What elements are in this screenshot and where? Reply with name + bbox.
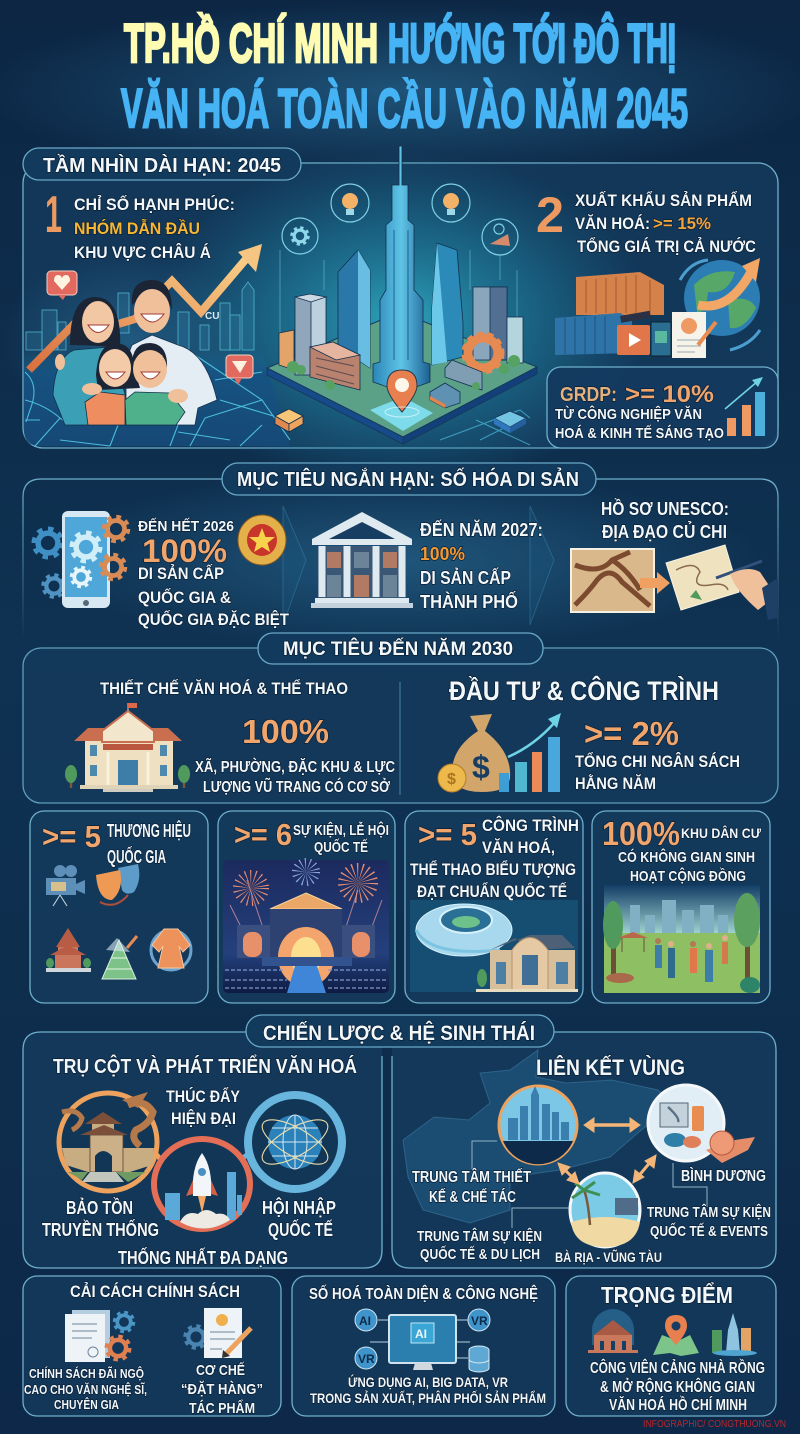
icon: money bag and bars: $ bbox=[472, 749, 490, 785]
item 2 cultural export: >= 15% bbox=[653, 214, 711, 233]
left tower, orange block bbox=[279, 330, 294, 370]
text block: policy items: CAO CHO VĂN NGHỆ SĨ, bbox=[24, 1382, 147, 1397]
text block: Nha Rong bbox=[590, 1358, 765, 1414]
chevron dividers bbox=[283, 506, 554, 625]
icon: ribbon bubble bbox=[226, 355, 253, 385]
stat: 2 percent: >= 2% bbox=[584, 715, 679, 752]
ring: tradition bbox=[59, 1092, 163, 1191]
stat: 100%: 100% bbox=[242, 713, 329, 750]
text block: policy items bbox=[24, 1362, 263, 1417]
text block: total budget: HẰNG NĂM bbox=[575, 774, 656, 793]
heading: cultural institutions: THIẾT CHẾ VĂN HOÁ & THỂ THAO bbox=[100, 679, 348, 698]
street grid floor bbox=[24, 350, 290, 446]
icon: VR bubble: VR bbox=[471, 1314, 488, 1328]
icon: cube orange bbox=[275, 409, 303, 432]
text block: total budget: TỔNG CHI NGÂN SÁCH bbox=[575, 752, 740, 771]
heading pill: long-term vision: TẦM NHÌN DÀI HẠN: 2045 bbox=[43, 154, 281, 177]
item 1 happiness index: CHỈ SỐ HẠNH PHÚC: bbox=[74, 194, 235, 214]
item 2 cultural export: XUẤT KHẨU SẢN PHẨM bbox=[575, 191, 752, 210]
pink building bbox=[310, 342, 360, 390]
labels: pillars: TRUYỀN THỐNG bbox=[42, 1219, 159, 1240]
icon: shipping containers bbox=[555, 272, 664, 355]
card: community spaces: CÓ KHÔNG GIAN SINH bbox=[618, 848, 755, 866]
arrows: links bbox=[558, 1118, 656, 1184]
callout: GRDP: TỪ CÔNG NGHIỆP VĂN bbox=[555, 405, 702, 423]
ring: integration bbox=[237, 1095, 342, 1189]
card: national brands: THƯƠNG HIỆU bbox=[107, 820, 191, 841]
street grid bbox=[25, 355, 530, 446]
panel: pillars: TRỤ CỘT VÀ PHÁT TRIỂN VĂN HOÁ bbox=[53, 1054, 357, 1078]
labels: regional hubs: TRUNG TÂM SỰ KIỆN bbox=[647, 1203, 771, 1221]
icon: money bag and bars: $ bbox=[447, 771, 456, 788]
text block: end of 2026: QUỐC GIA ĐẶC BIỆT bbox=[138, 609, 290, 629]
map silhouette bbox=[403, 1050, 668, 1223]
heading pill: goals to 2030: MỤC TIÊU ĐẾN NĂM 2030 bbox=[283, 638, 513, 660]
icon: AI bubble: AI bbox=[359, 1314, 371, 1328]
labels: regional hubs: TRUNG TÂM SỰ KIỆN bbox=[417, 1227, 542, 1245]
text block: total budget bbox=[575, 752, 740, 793]
text block: policy items: CƠ CHẾ bbox=[196, 1362, 245, 1379]
illustration: park bbox=[603, 885, 760, 993]
panel: key projects: TRỌNG ĐIỂM bbox=[601, 1281, 733, 1308]
text block: Nha Rong: VĂN HOÁ HỒ CHÍ MINH bbox=[609, 1395, 747, 1414]
icon: media and document bbox=[617, 311, 716, 358]
title: TP.HỒ CHÍ MINH bbox=[124, 12, 378, 74]
panel: regional links bbox=[392, 1032, 776, 1268]
text block: by 2027: 100% bbox=[420, 544, 465, 564]
growth arrow: CU bbox=[205, 311, 219, 322]
card: iconic works: THỂ THAO BIỂU TƯỢNG bbox=[410, 860, 576, 879]
panel: digital transformation: SỐ HOÁ TOÀN DIỆN & CÔNG NGHỆ bbox=[309, 1283, 538, 1303]
panel: key projects bbox=[566, 1276, 776, 1416]
card: community spaces bbox=[592, 811, 770, 1003]
illustration: stage with fireworks bbox=[223, 860, 389, 993]
illustration: stadium and opera house bbox=[410, 900, 578, 992]
labels: regional hubs: KẾ & CHẾ TÁC bbox=[429, 1187, 516, 1206]
heading: investment: ĐẦU TƯ & CÔNG TRÌNH bbox=[449, 675, 719, 706]
text block: by 2027: THÀNH PHỐ bbox=[420, 591, 518, 612]
text block: by 2027: DI SẢN CẤP bbox=[420, 567, 511, 588]
card: iconic works: VĂN HOÁ, bbox=[482, 838, 555, 857]
icon: layered pyramid with pen bbox=[102, 936, 137, 979]
icon: national emblem bbox=[238, 515, 286, 565]
card: national brands: QUỐC GIA bbox=[107, 846, 166, 867]
labels: pillars: HIỆN ĐẠI bbox=[171, 1109, 236, 1128]
labels: pillars: THÚC ĐẨY bbox=[166, 1087, 241, 1106]
labels: pillars: BẢO TỒN bbox=[66, 1197, 133, 1218]
icon: database bbox=[469, 1346, 489, 1372]
panel: policy reform bbox=[23, 1276, 281, 1417]
icon: AI monitor bbox=[370, 1315, 470, 1370]
hub: Ho Chi Minh City bbox=[499, 1086, 577, 1164]
text block: policy items: TÁC PHẨM bbox=[189, 1399, 255, 1417]
labels: regional hubs: BÌNH DƯƠNG bbox=[681, 1166, 766, 1185]
ring: modernisation bbox=[154, 1139, 250, 1229]
card: iconic works: >= 5 bbox=[418, 817, 477, 852]
icon: commissioning contract bbox=[185, 1308, 251, 1358]
labels: regional hubs: BÀ RỊA - VŨNG TÀU bbox=[555, 1248, 662, 1265]
text block: end of 2026: ĐẾN HẾT 2026 bbox=[138, 518, 234, 535]
panel: digital transformation bbox=[292, 1276, 555, 1416]
text block: AI application bbox=[310, 1373, 546, 1406]
isometric city bbox=[267, 146, 537, 444]
heading pill: strategy and ecosystem bbox=[246, 1015, 554, 1047]
text block: policy items: CHÍNH SÁCH ĐÃI NGỘ bbox=[29, 1366, 144, 1381]
item 2 cultural export: TỔNG GIÁ TRỊ CẢ NƯỚC bbox=[577, 237, 756, 256]
right gear bbox=[468, 338, 498, 368]
text block: by 2027: ĐẾN NĂM 2027: bbox=[420, 519, 543, 540]
icon: phone with gears bbox=[34, 511, 128, 608]
heading pill: strategy and ecosystem: CHIẾN LƯỢC & HỆ SINH THÁI bbox=[263, 1021, 535, 1045]
icon: money bag and bars bbox=[438, 713, 561, 792]
text block: AI application: TRONG SẢN XUẤT, PHÂN PHỐI SẢN PHẨM bbox=[310, 1389, 546, 1406]
icon: paper map and hand bbox=[666, 545, 778, 620]
bar chart: GRDP growth bbox=[725, 377, 765, 436]
panel: policy reform: CẢI CÁCH CHÍNH SÁCH bbox=[70, 1282, 240, 1301]
panel: long-term vision bbox=[0, 146, 778, 490]
card: iconic works: CÔNG TRÌNH bbox=[482, 816, 579, 835]
icon: lightbulb right bbox=[432, 184, 470, 222]
labels: regional hubs bbox=[412, 1166, 771, 1265]
icon: film camera bbox=[46, 865, 85, 906]
text block: wards and armed forces: LƯỢNG VŨ TRANG CÓ CƠ SỞ bbox=[203, 776, 390, 796]
divider bbox=[399, 682, 401, 795]
heading pill: digitising heritage: MỤC TIÊU NGẮN HẠN: SỐ HÓA DI SẢN bbox=[237, 467, 579, 491]
text block: Nha Rong: & MỞ RỘNG KHÔNG GIAN bbox=[600, 1377, 755, 1396]
icon: policy document with gears bbox=[65, 1310, 134, 1362]
connector lines bbox=[472, 1141, 707, 1228]
text block: policy items: “ĐẶT HÀNG” bbox=[181, 1381, 263, 1398]
icon: globe with arrow bbox=[680, 258, 760, 350]
card: iconic works bbox=[405, 811, 583, 1003]
text block: AI application: ỨNG DỤNG AI, BIG DATA, VR bbox=[348, 1373, 508, 1390]
item 1 happiness index: KHU VỰC CHÂU Á bbox=[74, 243, 211, 262]
icon: cube blue bbox=[494, 411, 526, 433]
hub: Ba Ria - Vung Tau bbox=[570, 1173, 640, 1247]
growth arrow bbox=[29, 244, 262, 370]
labels: regional hubs: TRUNG TÂM THIẾT bbox=[412, 1167, 531, 1186]
text block: UNESCO dossier bbox=[601, 498, 729, 542]
card: national brands bbox=[30, 811, 208, 1003]
item 1 happiness index: 1 bbox=[45, 186, 62, 244]
skyline bbox=[26, 282, 254, 350]
card: community spaces: KHU DÂN CƯ bbox=[681, 824, 761, 841]
labels: pillars: QUỐC TẾ bbox=[268, 1219, 333, 1240]
labels: regional hubs: QUỐC TẾ & DU LỊCH bbox=[420, 1245, 540, 1263]
card: international festivals bbox=[218, 811, 395, 1003]
heading pill: digitising heritage bbox=[222, 463, 596, 495]
title bbox=[121, 12, 688, 139]
heading pill: long-term vision bbox=[23, 148, 301, 180]
arrow: map to paper bbox=[640, 572, 670, 594]
icon: gear ring bbox=[282, 218, 318, 254]
labels: regional hubs: QUỐC TẾ & EVENTS bbox=[650, 1222, 768, 1240]
text block: end of 2026 bbox=[138, 518, 290, 629]
icon: AI monitor: AI bbox=[415, 1327, 427, 1341]
card: international festivals: >= 6 bbox=[234, 817, 292, 852]
icon: lightbulb left bbox=[331, 184, 369, 222]
text block: end of 2026: 100% bbox=[142, 533, 227, 569]
text block: end of 2026: QUỐC GIA & bbox=[138, 587, 231, 607]
text block: policy items: CHUYÊN GIA bbox=[54, 1397, 119, 1412]
icon: VR bubble lower: VR bbox=[358, 1352, 375, 1366]
callout: GRDP bbox=[547, 367, 778, 448]
panel: goals to 2030 bbox=[23, 633, 778, 803]
icon: VR bubble lower bbox=[355, 1347, 377, 1369]
icon: map pin bbox=[653, 1315, 699, 1356]
text block: wards and armed forces bbox=[195, 756, 395, 796]
card: community spaces: 100% bbox=[602, 815, 680, 852]
central tower bbox=[373, 146, 430, 392]
callout: GRDP: GRDP: bbox=[560, 384, 617, 406]
family illustration bbox=[53, 280, 217, 425]
tech circuit lines bbox=[280, 250, 517, 340]
text block: wards and armed forces: XÃ, PHƯỜNG, ĐẶC KHU & LỰC bbox=[195, 756, 395, 776]
card: national brands: >= 5 bbox=[42, 819, 101, 854]
icon: AI bubble bbox=[355, 1309, 377, 1331]
text block: end of 2026: DI SẢN CẤP bbox=[138, 564, 224, 583]
item 2 cultural export bbox=[536, 187, 756, 256]
labels: pillars bbox=[42, 1087, 336, 1268]
labels: pillars: THỐNG NHẤT ĐA DẠNG bbox=[118, 1247, 288, 1268]
icon: riverside city bbox=[712, 1313, 757, 1356]
text block: by 2027 bbox=[420, 519, 543, 612]
panel: pillars bbox=[23, 1032, 382, 1268]
panel: short-term goals bbox=[23, 463, 778, 650]
item 2 cultural export: 2 bbox=[536, 187, 564, 243]
icon: heart bubble bbox=[47, 271, 77, 300]
callout: GRDP: >= 10% bbox=[625, 381, 714, 408]
item 2 cultural export: VĂN HOÁ: bbox=[575, 214, 650, 233]
icon: Nha Rong wharf bbox=[588, 1309, 638, 1353]
callout: GRDP: HOÁ & KINH TẾ SÁNG TẠO bbox=[555, 425, 724, 442]
hub: Binh Duong bbox=[648, 1085, 755, 1163]
icon: tunnel map bbox=[571, 549, 654, 612]
text block: UNESCO dossier: HỒ SƠ UNESCO: bbox=[601, 498, 729, 519]
heading: regional links: LIÊN KẾT VÙNG bbox=[536, 1055, 685, 1080]
item 1 happiness index: NHÓM DẪN ĐẦU bbox=[74, 219, 200, 238]
icon: pagoda bbox=[46, 928, 91, 972]
card: community spaces: HOẠT CỘNG ĐỒNG bbox=[630, 867, 746, 885]
icon: theatre masks bbox=[96, 864, 139, 905]
text block: UNESCO dossier: ĐỊA ĐẠO CỦ CHI bbox=[602, 521, 727, 542]
card: international festivals: QUỐC TẾ bbox=[314, 838, 368, 856]
icon: location pin bbox=[385, 370, 419, 417]
icon: VR bubble bbox=[468, 1309, 490, 1331]
icon: hand ring bbox=[482, 219, 518, 255]
icon: traditional robe bbox=[151, 929, 191, 970]
icon: heritage building bbox=[311, 512, 413, 608]
icon: cultural house bbox=[65, 703, 190, 792]
card: international festivals: SỰ KIỆN, LỄ HỘI bbox=[293, 821, 389, 839]
card: iconic works: ĐẠT CHUẨN QUỐC TẾ bbox=[417, 881, 567, 901]
labels: pillars: HỘI NHẬP bbox=[262, 1197, 336, 1218]
item 1 happiness index bbox=[45, 186, 235, 262]
heading pill: goals to 2030 bbox=[258, 633, 543, 664]
